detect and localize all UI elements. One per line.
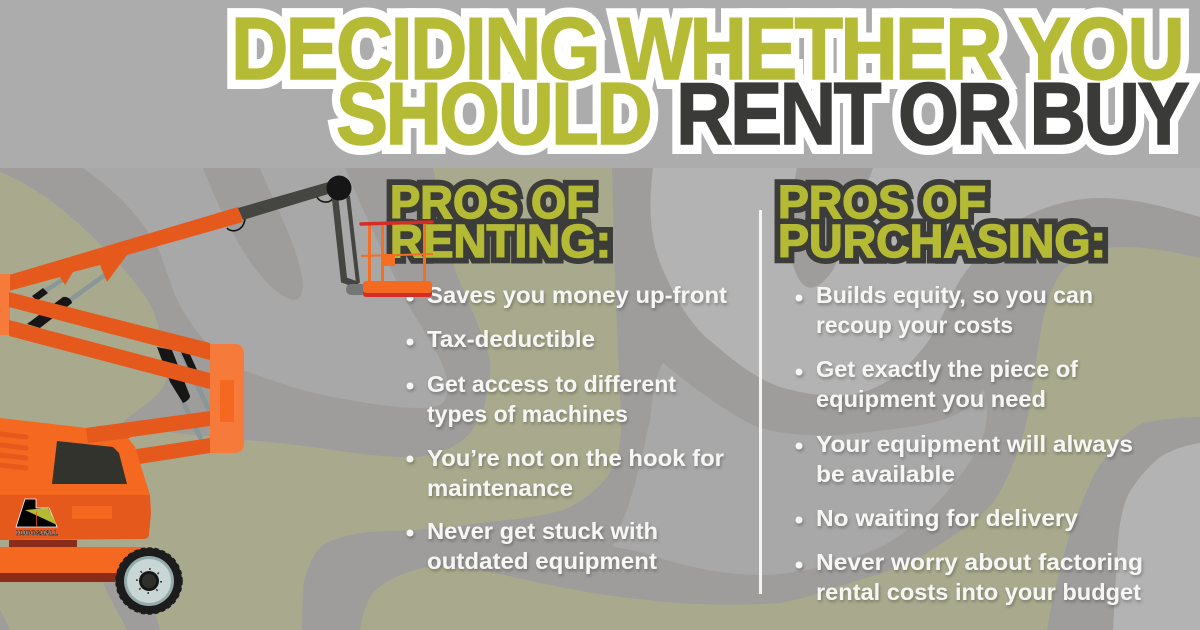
- list: pros of renting: Saves you money up-front: [427, 282, 727, 308]
- list: pros of renting: Never get stuck with: [427, 518, 658, 544]
- elbow detail: [220, 380, 234, 422]
- upper body: [0, 418, 150, 495]
- hose loops: [227, 197, 333, 231]
- boom actuators: [27, 275, 209, 439]
- list: pros of renting: Get access to different: [427, 371, 676, 397]
- list: pros of purchasing: equipment you need: [816, 386, 1046, 412]
- pivot joint: [326, 176, 352, 200]
- list: pros of purchasing: No waiting for delivery: [816, 505, 1078, 531]
- heading outlines: [390, 176, 1106, 267]
- rear linkage arms: [86, 411, 210, 465]
- rear linkage overlay: [86, 422, 130, 443]
- chassis: [0, 540, 146, 582]
- divider between columns: [759, 210, 762, 594]
- list: pros of renting: outdated equipment: [427, 548, 657, 574]
- title: [231, 0, 1189, 163]
- heading: pros of renting: [390, 176, 611, 267]
- vents: [0, 434, 26, 468]
- list: pros of renting: Tax-deductible: [427, 326, 595, 352]
- logo: Hugg and Hall: HUGG&HALL: [16, 530, 58, 537]
- title: SHOULD: [336, 64, 650, 163]
- left column: [0, 274, 10, 335]
- lower body: [0, 495, 151, 540]
- wheel: [116, 548, 182, 614]
- lower boom arms: [9, 292, 210, 389]
- list: pros of purchasing: Get exactly the piece of: [816, 356, 1078, 382]
- body panel: [72, 506, 112, 519]
- list: pros of renting: [406, 282, 727, 574]
- list: pros of renting: maintenance: [427, 475, 573, 501]
- list: pros of purchasing: rental costs into your budget: [816, 579, 1141, 605]
- heading: pros of renting: PROS OF: [390, 176, 594, 228]
- list: pros of purchasing: Your equipment will always: [816, 431, 1133, 457]
- basket support: [335, 196, 358, 285]
- list: pros of purchasing: be available: [816, 461, 955, 487]
- upper boom: [9, 207, 243, 291]
- heading: pros of purchasing: PURCHASING:: [778, 215, 1106, 267]
- cab window: [52, 441, 127, 484]
- basket mount: [346, 284, 366, 295]
- heading: pros of renting: RENTING:: [390, 215, 611, 267]
- list: pros of renting: You’re not on the hook for: [427, 445, 724, 471]
- list: pros of purchasing: recoup your costs: [816, 312, 1013, 338]
- basket railing: [361, 222, 433, 283]
- list: pros of renting: types of machines: [427, 401, 628, 427]
- list: pros of purchasing: Builds equity, so you can: [816, 282, 1093, 308]
- telescoping arm: [238, 181, 335, 220]
- list: pros of purchasing: [796, 282, 1143, 605]
- logo: Hugg and Hall: [16, 499, 58, 537]
- list: pros of purchasing: Never worry about factoring: [816, 549, 1143, 575]
- heading: pros of purchasing: PROS OF: [778, 176, 986, 228]
- basket floor: [363, 281, 432, 297]
- elbow block: [210, 344, 244, 453]
- title outline: [231, 0, 1189, 163]
- illustration: orange boom lift: [0, 176, 433, 614]
- heading: pros of purchasing: [778, 176, 1106, 267]
